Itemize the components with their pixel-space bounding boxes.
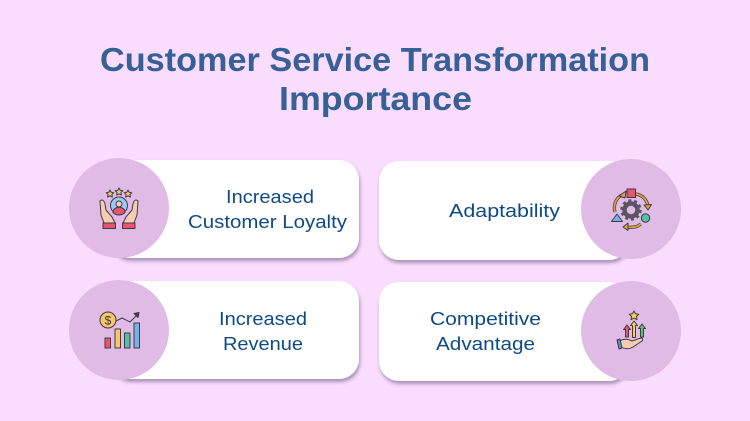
icon circle bbox=[581, 159, 681, 259]
icon: gear with cycling shapes bbox=[612, 189, 652, 230]
label bbox=[188, 187, 347, 232]
card bbox=[379, 161, 629, 260]
icon: coin and bar chart: $ bbox=[105, 314, 112, 328]
label: Revenue bbox=[223, 334, 303, 354]
panel: competitive advantage bbox=[379, 281, 681, 381]
icon circle bbox=[69, 158, 169, 258]
title: Importance bbox=[279, 80, 472, 117]
card bbox=[110, 281, 359, 379]
panel: adaptability bbox=[379, 159, 681, 260]
label: Competitive bbox=[430, 309, 541, 329]
title: Customer Service Transformation bbox=[100, 41, 650, 78]
label: Increased bbox=[219, 309, 307, 329]
card bbox=[379, 282, 629, 381]
icon: hand with rising arrows and star bbox=[617, 311, 646, 349]
icon circle bbox=[581, 281, 681, 381]
panel: increased revenue bbox=[69, 280, 359, 380]
label bbox=[430, 309, 541, 354]
label: Customer Loyalty bbox=[188, 212, 347, 232]
label: Advantage bbox=[436, 334, 535, 354]
label: Adaptability bbox=[449, 201, 560, 221]
label bbox=[219, 309, 307, 354]
title bbox=[100, 41, 650, 117]
panel: increased customer loyalty bbox=[69, 158, 359, 258]
label: Increased bbox=[226, 187, 314, 207]
icon: hands holding customer with stars bbox=[100, 188, 138, 228]
icon circle bbox=[69, 280, 169, 380]
icon: coin and bar chart bbox=[100, 312, 140, 348]
card bbox=[110, 160, 359, 258]
